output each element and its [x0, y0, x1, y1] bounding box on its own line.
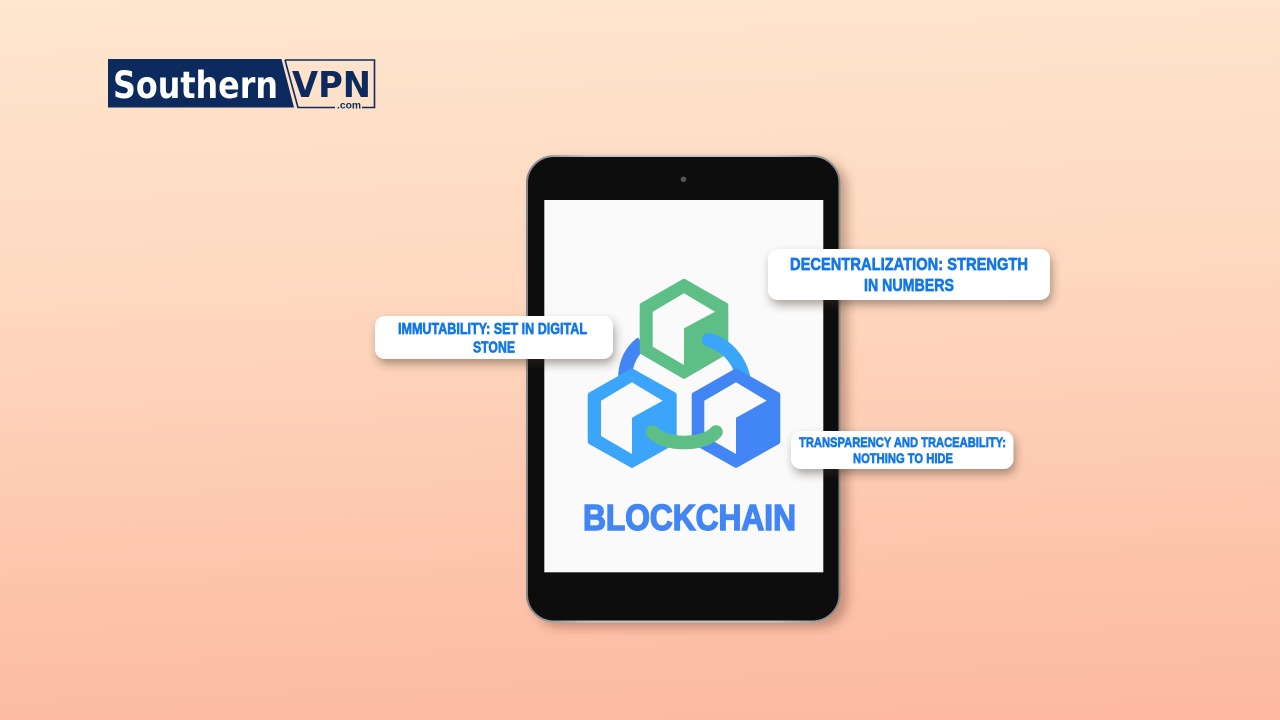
logo word Southern: Southern	[113, 64, 278, 107]
callout: immutability: STONE	[473, 340, 515, 356]
callout: decentralization	[768, 249, 1050, 300]
tablet device	[527, 156, 840, 622]
callout: decentralization: DECENTRALIZATION: STRENGTH	[790, 254, 1028, 274]
callout: immutability	[375, 316, 613, 359]
logo suffix .com: .com	[337, 100, 361, 112]
dark blue cube	[694, 371, 778, 465]
heading: BLOCKCHAIN: BLOCKCHAIN	[583, 497, 796, 538]
callout: transparency and traceability	[791, 431, 1014, 469]
callout: immutability: IMMUTABILITY: SET IN DIGITAL	[398, 321, 587, 338]
logo navy plate	[108, 59, 294, 108]
dark blue link arc	[625, 343, 642, 376]
light blue cube	[590, 371, 674, 465]
logo word VPN: VPN	[292, 65, 371, 106]
tablet screen	[544, 200, 823, 572]
callout: decentralization: IN NUMBERS	[864, 275, 954, 295]
blockchain logo icon: three linked hexagonal cubes	[590, 281, 778, 465]
green cube	[642, 281, 726, 376]
green link arc	[652, 432, 716, 442]
logo: SouthernVPN	[108, 59, 374, 112]
callout: transparency and traceability: NOTHING TO HIDE	[853, 450, 953, 466]
tablet body	[527, 156, 840, 622]
tablet camera	[681, 176, 686, 182]
light blue link arc	[709, 340, 743, 376]
logo outline around VPN	[285, 60, 374, 108]
callout: transparency and traceability: TRANSPARENCY AND TRACEABILITY:	[799, 434, 1006, 450]
